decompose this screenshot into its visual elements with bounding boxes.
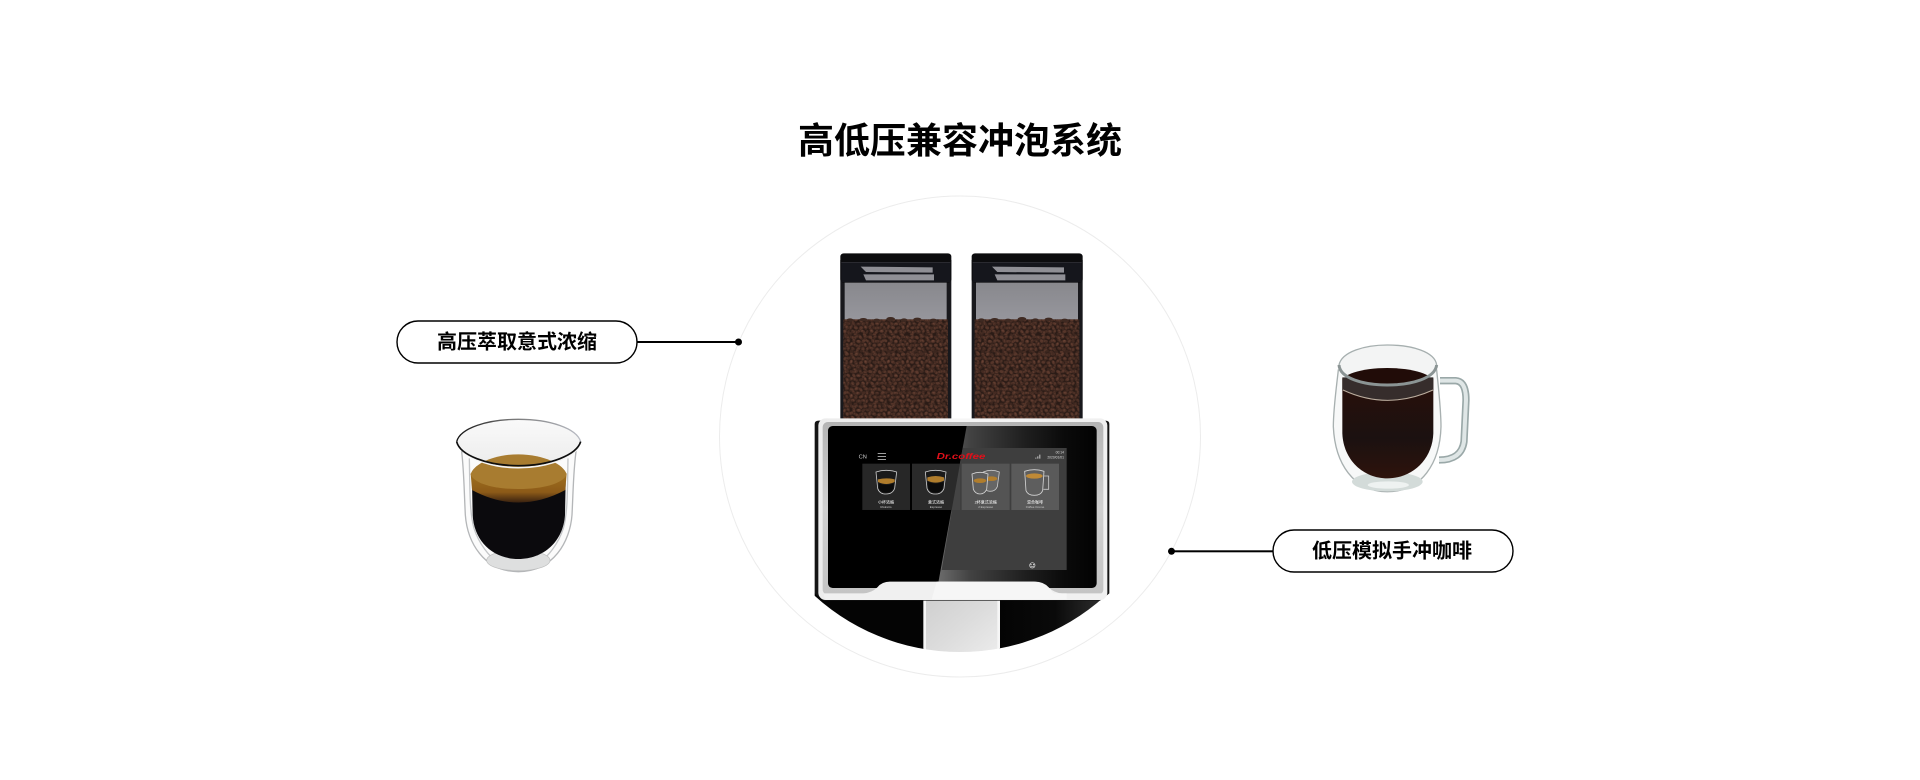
title: 高低压兼容冲泡系统 [798,120,1122,161]
tile labels [878,500,1044,508]
callout pill: low pressure: 低压模拟手冲咖啡 [1312,540,1472,562]
screen header: Dr.coffee [937,451,986,461]
rim front [457,442,581,466]
glass base [1352,472,1423,491]
rim back [1339,345,1437,365]
tile labels: 意式浓缩 [928,499,944,505]
callout pill: high pressure: 高压萃取意式浓缩 [437,330,597,354]
coffee liquid [472,483,566,559]
callout pill: low pressure [1273,530,1513,572]
rim front [1339,365,1437,385]
rim interior [1339,345,1437,385]
drink tiles [862,464,1059,510]
tile cups [876,470,1049,495]
touch screen [858,426,1072,588]
crema surface [471,454,567,489]
crema band [471,473,567,502]
mug [1333,345,1466,492]
callout pill: high pressure [397,321,637,363]
glass base [487,550,550,571]
outer glass wall [462,452,576,572]
tile labels: Espresso [930,505,943,509]
tile labels: 混合咖啡 [1027,499,1043,505]
rim back [457,419,581,442]
rim interior [457,419,581,466]
callout line right [1168,548,1273,555]
service icon [1030,563,1035,568]
bean hopper right [972,253,1083,420]
glass body [1333,370,1441,492]
espresso cup [457,419,581,572]
front tray lip [824,582,1102,600]
tile labels: 小杯浓缩 [878,499,894,505]
mug handle [1439,381,1466,460]
screen header: 00:14 [1056,451,1064,455]
screen header: CN [859,455,867,461]
coffee machine [815,253,1109,657]
fog band [1342,377,1433,400]
tile labels: Ristretto [880,505,892,509]
screen header [858,451,1064,460]
bean hopper left [840,253,951,420]
central circle outline [720,196,1200,677]
coffee surface [1348,368,1428,384]
machine head [815,418,1109,601]
callout line left [637,338,742,346]
tile labels: 2 Espresso [978,505,993,509]
rim highlight [459,448,579,468]
water line [1343,390,1433,400]
tile labels: Coffee Creme [1026,505,1045,509]
lower machine body [815,593,1109,657]
coffee [1342,378,1433,478]
screen header: 2020/01/01 [1047,456,1064,460]
tile labels: 2杯意式浓缩 [975,499,997,505]
